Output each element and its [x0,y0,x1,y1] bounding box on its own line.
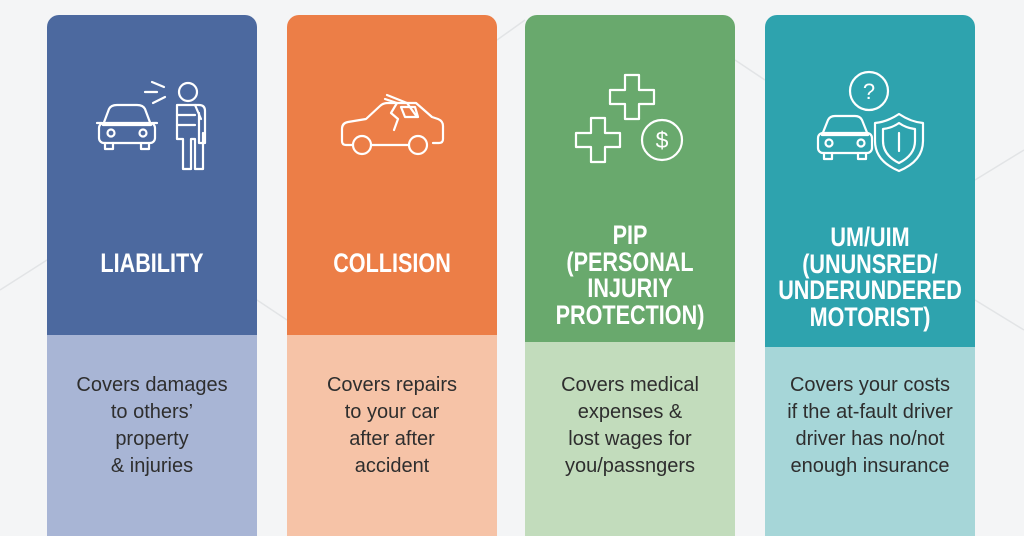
text: liability: Covers damages [76,374,228,396]
text: collision [327,374,457,477]
title: pip: PROTECTION) [556,300,704,330]
text: liability: to others’ [111,401,193,423]
title: collision: COLLISION [333,248,451,278]
title: pip: (PERSONAL [566,246,694,276]
title: pip [556,220,704,330]
title: pip: INJURIY [587,273,673,303]
icon: car, question, shield: ? [863,79,875,104]
text: liability: & injuries [111,455,193,477]
text: pip: you/passngers [565,455,695,477]
panel: liability [47,15,257,536]
text: collision: Covers repairs [327,374,457,396]
title: um/uim: UNDERUNDERED [778,275,962,305]
icon: car and injured person [96,80,206,170]
panel: pip [525,15,735,536]
text: pip: expenses & [578,401,682,423]
text: collision: after after [349,428,435,450]
title: um/uim: (UNUNSRED/ [802,248,938,278]
title: um/uim: UM/UIM [830,222,910,252]
text: collision: to your car [345,401,439,423]
text: pip: Covers medical [561,374,699,396]
text: liability [76,374,228,477]
title: um/uim [778,222,962,332]
text: collision: accident [355,455,429,477]
text: pip: lost wages for [568,428,692,450]
title: um/uim: MOTORIST) [810,302,930,332]
text: liability: property [115,428,189,450]
text: um/uim [787,374,953,477]
icon: car, question, shield [816,70,924,172]
text: pip [561,374,699,477]
text: um/uim: Covers your costs [790,374,950,396]
title: liability: LIABILITY [100,248,204,278]
icon: damaged car [340,94,444,156]
text: um/uim: if the at-fault driver [787,401,953,423]
text: um/uim: driver has no/not [796,428,944,450]
text: um/uim: enough insurance [790,455,950,477]
icon: medical crosses and dollar [574,74,684,164]
panel: um/uim [765,15,975,536]
panel: collision [287,15,497,536]
icon: medical crosses and dollar: $ [656,127,669,153]
title: pip: PIP [613,220,647,250]
